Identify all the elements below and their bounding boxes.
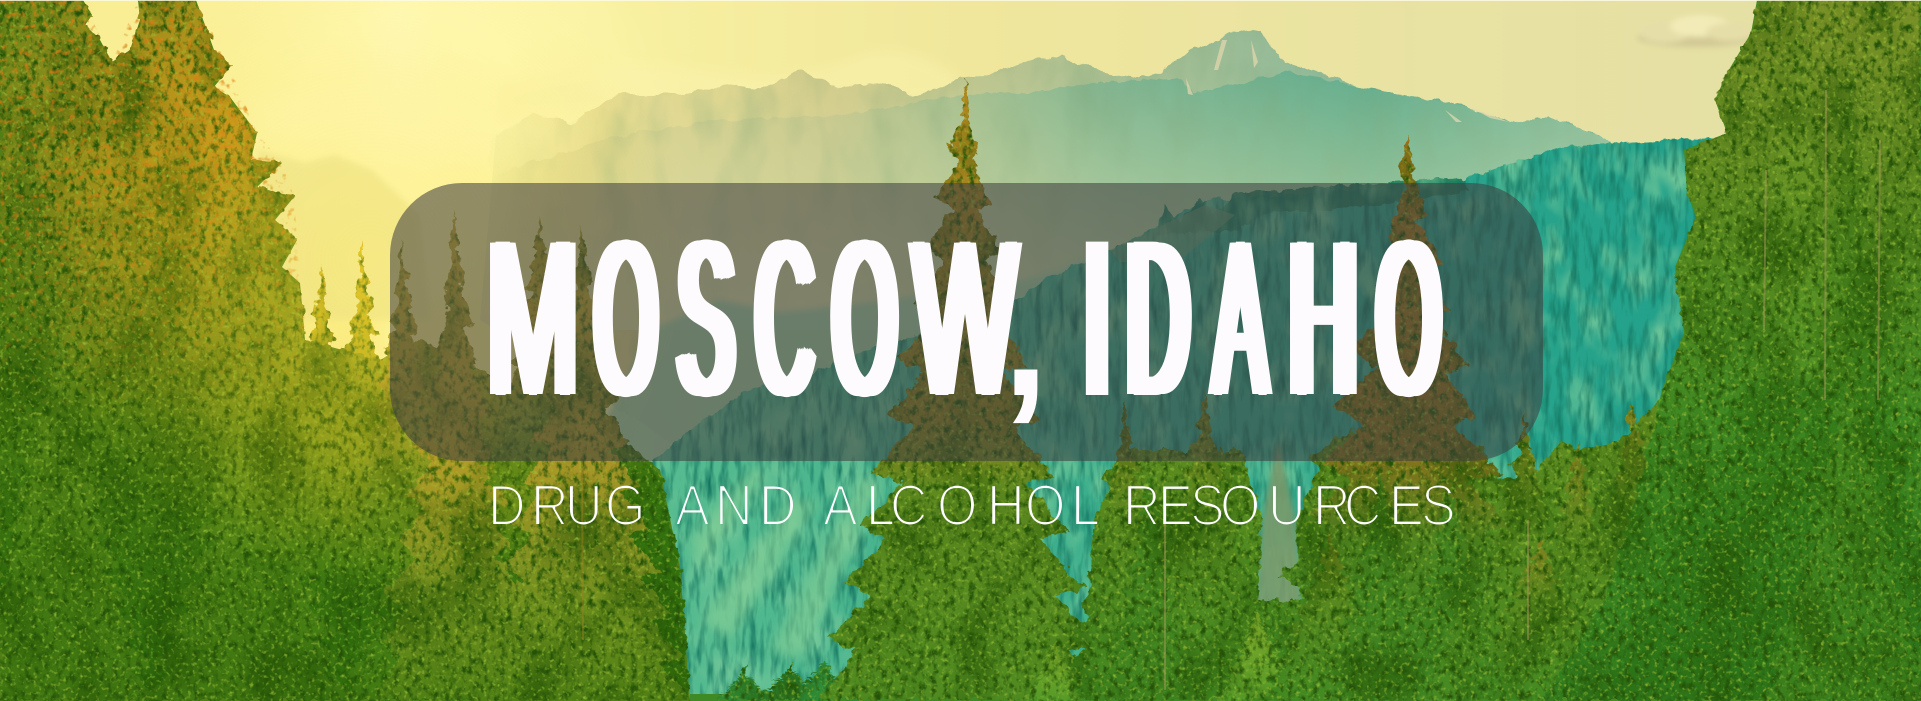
foreground pines along the bottom	[1213, 610, 1303, 701]
title: Moscow, Idaho: W	[912, 195, 1016, 441]
top edge highlight	[0, 0, 1921, 1]
dark tree line on the ridge	[1156, 178, 1470, 236]
right-centre pine behind panel	[1263, 135, 1553, 701]
light tiers on right pines	[1740, 0, 1921, 700]
middle valley ridge	[600, 250, 1100, 500]
tier shading on right pines	[1590, 60, 1921, 701]
mountain snow streaks	[1186, 40, 1509, 122]
clouds	[1637, 15, 1754, 47]
orange needles on the left trees	[0, 0, 320, 430]
central tall pine	[820, 80, 1110, 700]
title: Moscow, Idaho: O	[1377, 195, 1440, 441]
title: Moscow, Idaho: S	[678, 195, 734, 441]
title: Moscow, Idaho	[487, 195, 1444, 441]
sun glow	[60, 0, 860, 500]
small sunlit yellow trees	[274, 262, 370, 542]
distant small trees at the valley floor	[715, 660, 865, 701]
small pines in front of the hillside	[1060, 402, 1190, 701]
left pine tree mass	[0, 0, 690, 701]
subtitle: drug and alcohol resources: DRUG AND ALCOHOL RESOURCES	[488, 474, 1456, 538]
tier shading on left pines	[0, 60, 290, 701]
grey bare tree behind the lower forest	[1254, 440, 1304, 620]
treetops in the lower center band	[1100, 470, 1510, 700]
back mountain range	[490, 28, 1640, 460]
pines right of the panel	[1450, 412, 1600, 701]
mountains	[490, 28, 1640, 460]
light streaks on lower hillside	[690, 470, 885, 660]
wispy cloud over the left range	[500, 51, 960, 120]
title: Moscow, Idaho: O	[595, 195, 657, 441]
forested teal hillside	[640, 138, 1727, 701]
title: Moscow, Idaho: M	[487, 195, 579, 441]
distant pale mountain behind the sun	[258, 150, 430, 320]
light clearing on hillside	[1110, 205, 1235, 262]
sunlit part of the left mass	[0, 0, 690, 701]
title: Moscow, Idaho: D	[1127, 195, 1189, 441]
mountain haze	[592, 92, 1610, 330]
sunlight cast over the trees	[0, 0, 760, 620]
right pine tree mass	[1542, 0, 1921, 701]
lower center forest band	[1085, 400, 1700, 701]
title: Moscow, Idaho: O	[833, 195, 896, 441]
title: Moscow, Idaho: ,	[995, 195, 1056, 441]
title: Moscow, Idaho: H	[1290, 195, 1357, 441]
translucent title panel	[390, 183, 1543, 461]
title: Moscow, Idaho: A	[1214, 195, 1266, 441]
title: Moscow, Idaho: I	[1066, 195, 1128, 441]
trunks on the right trees	[582, 90, 1880, 690]
light tiers on left pines	[0, 330, 520, 700]
trees behind the panel, left	[352, 238, 452, 538]
front mountain ridge	[490, 73, 1640, 460]
title: Moscow, Idaho: C	[756, 195, 813, 441]
